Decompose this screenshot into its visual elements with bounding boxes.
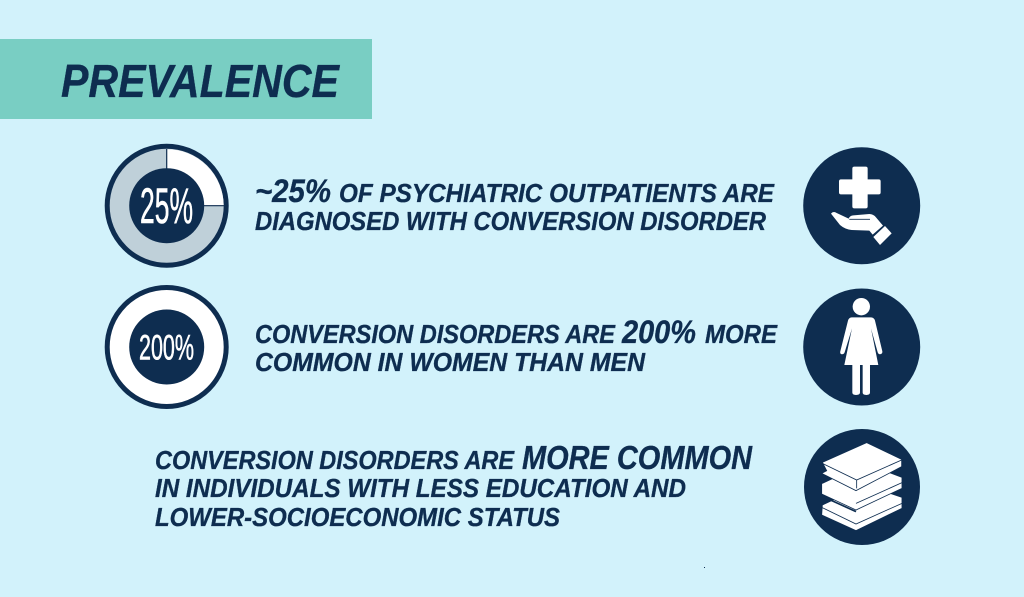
middle book <box>822 463 902 510</box>
text block: psychiatric outpatients: ~25% <box>255 173 331 209</box>
text block: psychiatric outpatients: OF PSYCHIATRIC OUTPATIENTS ARE <box>339 178 775 208</box>
donut chart: 25% <box>107 146 226 265</box>
text block: psychiatric outpatients <box>255 173 775 236</box>
text block: women vs men: MORE <box>705 319 778 349</box>
text block: women vs men: CONVERSION DISORDERS ARE <box>255 319 616 349</box>
text block: women vs men: COMMON IN WOMEN THAN MEN <box>255 347 646 377</box>
donut chart: 200%: 200% <box>139 328 194 368</box>
icon: woman figure <box>803 288 920 406</box>
text block: women vs men <box>255 314 778 377</box>
donut chart: 25%: 25% <box>140 178 193 234</box>
text block: education and status: LOWER-SOCIOECONOMIC STATUS <box>155 502 561 532</box>
heading banner: prevalence: PREVALENCE <box>61 55 340 107</box>
text block: education and status <box>155 439 753 532</box>
text block: education and status: IN INDIVIDUALS WITH LESS EDUCATION AND <box>155 473 686 503</box>
text block: psychiatric outpatients: DIAGNOSED WITH CONVERSION DISORDER <box>255 206 766 236</box>
donut chart: 200% <box>107 288 226 406</box>
text block: education and status: CONVERSION DISORDERS ARE <box>155 445 515 475</box>
text block: education and status: MORE COMMON <box>522 439 753 476</box>
icon: medical cross over hand <box>803 147 920 264</box>
bottom book <box>822 485 902 531</box>
text block: women vs men: 200% <box>621 314 696 350</box>
icon: stack of books <box>804 429 920 545</box>
top book <box>822 443 902 491</box>
heading banner: prevalence <box>0 39 372 119</box>
